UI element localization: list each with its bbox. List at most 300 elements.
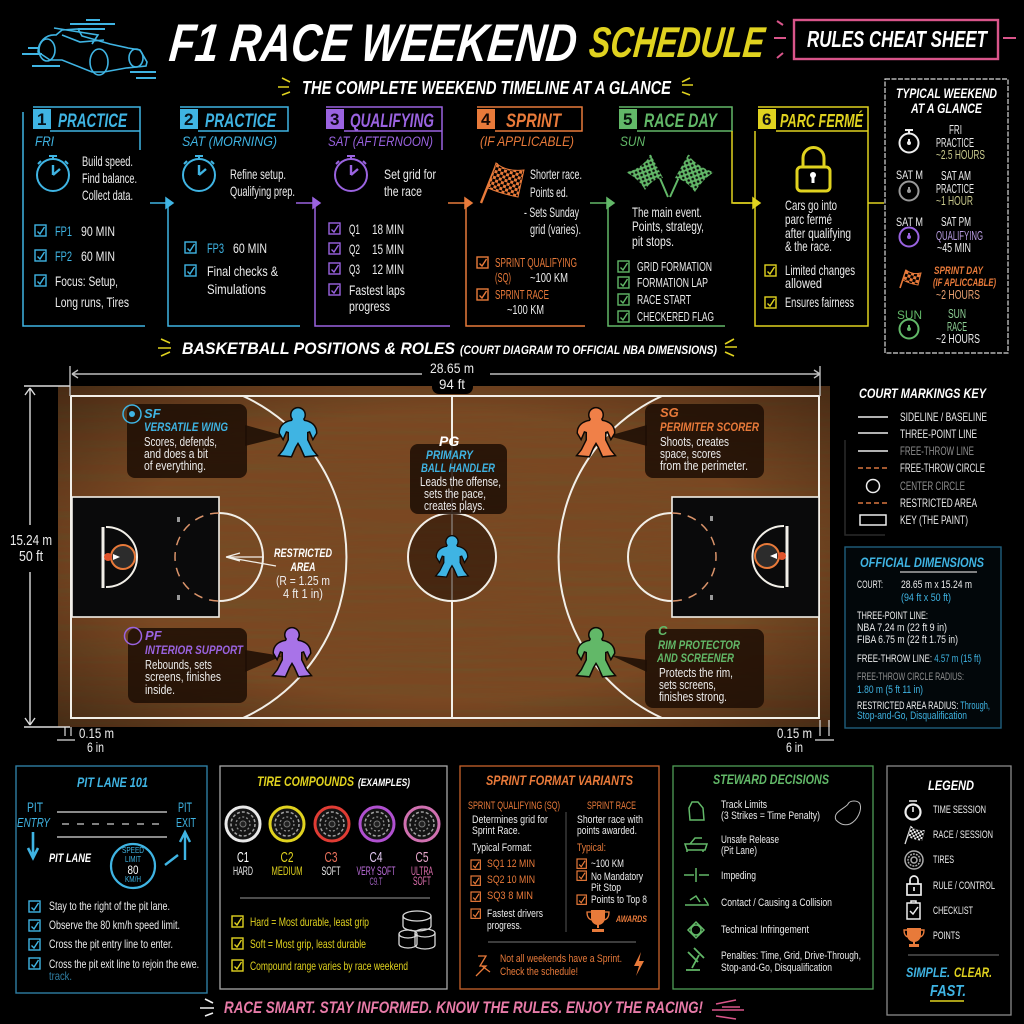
description: Qualifying prep. [230,183,295,199]
icon: checkered flag [481,163,524,203]
callout: power forward: PF [145,628,163,643]
dimension: court width: 15.24 m [10,532,52,549]
callout: shooting guard: Shoots, creates [660,434,729,449]
dimension list: FIBA 6.75 m (22 ft 1.75 in) [857,634,958,646]
dimension list: 1.80 m (5 ft 11 in) [857,684,923,696]
dimension: line width left [57,725,114,755]
dimension: court length: 94 ft [439,376,465,392]
icon: speed limit sign: SPEED [122,846,144,855]
checklist: 15 MIN [372,241,404,257]
icon: crossed checkered flags [626,155,714,197]
column: sprint race: SPRINT RACE [587,800,636,812]
key rows: THREE-POINT LINE [900,427,977,441]
court floor [58,386,830,727]
legend labels: POINTS [933,930,960,942]
heading: RACE DAY [644,111,719,132]
legend labels [933,804,995,942]
row: sprint day: SPRINT DAY [934,265,984,277]
left key [72,497,263,617]
row: saturday morning: ~1 HOUR [936,193,973,208]
dimension: court length: 28.65 m [430,360,474,376]
day label: SAT (AFTERNOON) [328,133,433,149]
heading: (EXAMPLES) [358,777,410,789]
panel: tire compounds [220,766,447,989]
step number 1 [33,109,51,129]
footer slogan: RACE SMART. STAY INFORMED. KNOW THE RULES. ENJOY THE RACING! [224,998,703,1017]
row: sprint day [900,265,996,302]
checklist: 60 MIN [81,248,115,264]
checklist: Cross the pit exit line to rejoin the ewe. [49,957,199,971]
player: power forward [274,628,310,676]
row: saturday afternoon: QUALIFYING [936,228,983,243]
callout: restricted area: (R = 1.25 m [276,573,330,588]
row: sunday: ~2 HOURS [936,331,980,346]
icon: trophy [587,910,609,932]
row: friday: PRACTICE [936,135,974,150]
panel: sprint [466,107,585,326]
dimension list: THREE-POINT LINE: [857,610,928,622]
tire: C1 hard: C1 [237,849,249,866]
day label: FRI [35,133,54,149]
checklist: FORMATION LAP [637,275,708,290]
callout: restricted area [226,546,332,601]
tire: C5 ultra soft: SOFT [413,874,431,888]
description [82,153,137,203]
section heading: basketball positions [158,339,737,358]
tire: C4 very soft [356,806,396,888]
checklist: Final checks & [207,263,279,279]
checklist: RACE START [637,292,691,307]
icon: stopwatch [183,156,215,191]
checklist: progress [349,298,390,314]
panel: practice saturday morning [168,107,300,326]
description [632,204,704,249]
panel: parc ferme [755,107,884,326]
checklist [329,221,405,314]
callout: restricted area: AREA [290,560,316,574]
callout: point guard: PRIMARY [426,448,474,462]
rule list: Contact / Causing a Collision [721,897,832,909]
step number 4 [477,109,495,129]
dimension: court width: 50 ft [19,548,44,565]
icon: speed limit sign: KM/H [125,875,141,884]
callout: point guard: PG [439,433,459,449]
column: sprint race: Shorter race with [577,814,643,826]
diagram: pit lane: PIT LANE [49,851,92,865]
row: saturday afternoon: SAT M [896,215,923,229]
dimension list: (94 ft x 50 ft) [901,592,951,604]
checklist: Ensures fairness [785,294,854,310]
description: pit stops. [632,233,674,249]
checklist: (SQ) [495,270,511,285]
callout: center: finishes strong. [659,689,727,704]
checklist: allowed [785,275,822,291]
tire: C3 soft [314,806,350,878]
icon: stopwatch [335,156,367,191]
icon: padlock [797,148,830,191]
callout: small forward [123,404,285,478]
heading: PRACTICE [58,111,128,132]
description [384,166,436,199]
checklist: ~100 KM [530,270,568,285]
day label: SUN [620,133,646,149]
diagram: pit lane [17,799,196,888]
callout: power forward: inside. [145,682,175,697]
key rows: RESTRICTED AREA [900,496,977,510]
callout: point guard: sets the pace, [424,486,486,501]
description: & the race. [785,238,832,254]
checklist [477,255,577,317]
player: shooting guard [578,408,614,456]
tire: C2 medium [270,806,304,878]
checklist: Q2 [349,241,360,257]
row: saturday morning: SAT AM [941,168,971,183]
checklist: Fastest laps [349,282,405,298]
column: sprint race: ~100 KM [591,858,624,870]
note: Not all weekends have a Sprint. [500,953,622,965]
callout: small forward: and does a bit [144,446,208,461]
checklist: Soft = Most grip, least durable [250,937,366,951]
checklist: 90 MIN [81,223,115,239]
description: after qualifying [785,225,851,241]
column: sprint race: points awarded. [577,825,637,837]
tagline: FAST. [930,983,966,1000]
checklist: ~100 KM [507,302,544,317]
tire: C4 very soft: VERY SOFT [356,864,396,878]
icon: race session [905,826,925,844]
dimension list: FREE-THROW LINE: 4.57 m (15 ft) [857,653,981,665]
row: sunday: SUN [948,306,966,321]
checklist: Long runs, Tires [55,294,129,310]
callout: center [610,623,764,708]
rule list: Impeding [721,870,756,882]
tire: C1 hard [226,806,260,878]
rule list: (Pit Lane) [721,845,757,857]
checklist: Q3 [349,261,360,277]
row: saturday afternoon [896,214,983,255]
checklist [185,240,279,297]
callout: point guard: BALL HANDLER [421,461,495,475]
callout: restricted area: RESTRICTED [274,546,332,560]
checklist [232,915,408,973]
rule list: Stop-and-Go, Disqualification [721,962,832,974]
icon: speed limit sign: 80 [128,863,139,877]
description: Points ed. [530,184,568,200]
court lines [71,396,819,718]
callout: small forward: of everything. [144,458,206,473]
dimension: court length [70,360,820,396]
description: Find balance. [82,170,137,186]
description: grid (varies). [530,221,581,237]
tire: C3 soft: C3 [324,849,338,866]
icon: stopwatch [37,156,69,191]
row: sprint day: ~2 HOURS [936,287,980,302]
tire: C4 very soft: C4 [370,849,382,866]
arrow [590,198,614,208]
dimension: court width [10,386,70,727]
heading: SPRINT [506,111,562,132]
callout: restricted area: 4 ft 1 in) [283,586,323,601]
key rows [858,410,987,527]
row: friday [900,122,985,162]
column: sprint qualifying: Fastest drivers [487,908,543,920]
step number 5: 5 [623,110,632,129]
callout: power forward: INTERIOR SUPPORT [145,643,244,657]
column: sprint race: Typical: [577,842,606,854]
tire: C1 hard: HARD [233,864,253,878]
column: sprint race: No Mandatory [591,871,643,883]
note [476,952,644,978]
section heading: basketball positions: BASKETBALL POSITIONS & ROLES [182,339,456,358]
checklist: FP2 [55,248,72,264]
panel: legend [887,766,1011,1015]
row: saturday afternoon: ~45 MIN [937,240,971,255]
row: friday: ~2.5 HOURS [936,147,985,162]
checklist [765,262,855,310]
arrow [150,198,173,208]
step number 1: 1 [37,110,46,129]
dimension: line width right: 6 in [786,739,803,755]
legend labels: CHECKLIST [933,905,973,917]
checklist: Hard = Most durable, least grip [250,915,369,929]
icon: time session [906,801,920,820]
description: Shorter race. [530,166,582,182]
description [230,166,295,199]
chart: basketball court diagram [58,386,830,727]
diagram: pit lane: PIT [178,799,192,815]
icon: rule control [907,876,921,895]
checklist: Limited changes [785,262,855,278]
icon: track outline [835,801,861,825]
player: point guard [437,536,467,576]
callout: center: AND SCREENER [656,651,734,665]
dimension list: FREE-THROW CIRCLE RADIUS: [857,671,964,683]
checklist [35,223,129,310]
row: saturday afternoon: SAT PM [941,214,971,229]
callout: center: RIM PROTECTOR [658,638,740,652]
step number 3 [326,109,344,129]
callout: shooting guard: space, scores [660,446,721,461]
tire: C4 very soft: C9.T [370,876,383,888]
row: saturday morning: PRACTICE [936,181,974,196]
checklist: GRID FORMATION [637,259,712,274]
row: friday: FRI [949,122,962,137]
heading: LEGEND [928,777,974,793]
note: Check the schedule! [500,966,578,978]
heading: TIRE COMPOUNDS [257,773,354,789]
step number 6 [758,109,776,129]
callout: shooting guard [608,404,764,478]
panel: race day [608,107,750,326]
checklist: 18 MIN [372,221,404,237]
checklist: CHECKERED FLAG [637,309,714,324]
dimension list: NBA 7.24 m (22 ft 9 in) [857,622,947,634]
row: saturday morning [896,168,974,208]
heading: STEWARD DECISIONS [713,771,830,787]
panel: pit lane 101 [16,766,207,993]
heading: OFFICIAL DIMENSIONS [860,554,985,570]
checklist: track. [49,969,72,983]
callout: center: Protects the rim, [659,665,733,680]
icon: checklist [907,901,920,919]
key rows: SIDELINE / BASELINE [900,410,987,424]
rule list: Unsafe Release [721,834,779,846]
heading: QUALIFYING [350,111,434,132]
title: F1 RACE WEEKEND [167,14,580,73]
day label: (IF APPLICABLE) [480,133,574,149]
description: Points, strategy, [632,218,704,234]
icons [684,802,709,970]
callout: small forward: Scores, defends, [144,434,217,449]
dimension: line width left: 6 in [87,739,104,755]
description: The main event. [632,204,702,220]
legend labels: TIRES [933,854,954,866]
panel: typical weekend at a glance [885,79,1008,353]
column: sprint qualifying: SQ2 10 MIN [487,874,535,886]
checklist: Simulations [207,281,266,297]
callout: small forward: VERSATILE WING [144,420,228,434]
column: sprint qualifying: SQ3 8 MIN [487,890,533,902]
tire: C5 ultra soft [404,806,440,888]
key rows: FREE-THROW LINE [900,444,974,458]
column: sprint qualifying: Sprint Race. [472,825,520,837]
tire: C5 ultra soft: ULTRA [411,864,433,878]
rule list: Penalties: Time, Grid, Drive-Through, [721,950,861,962]
panel: steward decisions [673,766,873,989]
callout: point guard: Leads the offense, [420,474,501,489]
diagram: pit lane: ENTRY [17,815,51,830]
heading [896,85,997,116]
dimension list: COURT: [857,579,883,591]
heading: PARC FERMÉ [780,110,864,131]
description [524,166,582,237]
dimension: line width left: 0.15 m [79,725,114,741]
badge: rules cheat sheet [774,20,1016,59]
description: the race [384,183,422,199]
checklist: 60 MIN [233,240,267,256]
checklist: FP3 [207,240,224,256]
dimension list: RESTRICTED AREA RADIUS: Through, [857,700,990,712]
subtitle: THE COMPLETE WEEKEND TIMELINE AT A GLANCE [302,78,672,98]
tire: C2 medium: MEDIUM [272,864,302,878]
dimension list [857,579,990,722]
tire: C3 soft: SOFT [322,864,341,878]
row: sunday: RACE [947,319,967,334]
heading: AT A GLANCE [910,100,982,116]
section heading: basketball positions: (COURT DIAGRAM TO OFFICIAL NBA DIMENSIONS) [460,343,717,357]
callout: small forward: SF [144,406,162,421]
column: sprint race: Points to Top 8 [591,894,647,906]
panel: sprint format variants [460,766,659,989]
description: parc fermé [785,211,832,227]
callout: shooting guard: from the perimeter. [660,458,748,473]
heading: COURT MARKINGS KEY [859,385,987,401]
panel: official dimensions [845,547,1001,728]
step number 2 [180,109,198,129]
checklist: Focus: Setup, [55,273,118,289]
callout: point guard [410,433,507,514]
heading: PRACTICE [205,111,277,132]
heading: SPRINT FORMAT VARIANTS [486,772,634,788]
description: Collect data. [82,187,133,203]
legend labels: RULE / CONTROL [933,880,995,892]
step number 2: 2 [184,110,193,129]
callout: power forward: Rebounds, sets [145,657,212,672]
description [785,197,851,254]
icon: points trophy [904,928,924,947]
day label: SAT (MORNING) [182,133,277,149]
column: sprint qualifying: progress. [487,920,522,932]
panel: practice friday [23,107,145,326]
dimension list: 28.65 m x 15.24 m [901,579,972,591]
player: small forward [280,408,316,456]
step number 6: 6 [762,110,771,129]
legend labels: TIME SESSION [933,804,986,816]
rule list: Technical Infringement [721,924,809,936]
arrow [296,198,320,208]
column: sprint race: AWARDS [615,914,647,924]
heading: PIT LANE 101 [77,774,148,790]
diagram: pit lane: PIT [27,799,43,815]
column: sprint qualifying [468,800,560,932]
tagline: SIMPLE. [906,964,950,980]
dimension list: Stop-and-Go, Disqualification [857,710,967,722]
icon: speed limit sign: LIMIT [125,855,141,864]
checklist: SPRINT QUALIFYING [495,255,577,270]
step number 3: 3 [330,110,339,129]
tire: C5 ultra soft: C5 [416,849,428,866]
callout: power forward [124,628,282,703]
checklist [618,259,714,324]
icon: tires [905,851,923,869]
column: sprint qualifying: Typical Format: [472,842,532,854]
row: sprint day: (IF APLICCABLE) [933,277,996,289]
arrow [448,198,472,208]
tagline [906,964,992,1001]
column: sprint qualifying: Determines grid for [472,814,548,826]
icon: racing car [22,20,156,78]
rule list [721,799,861,974]
right key [628,497,819,617]
legend labels: RACE / SESSION [933,829,993,841]
panel: qualifying [315,107,450,326]
player: center [578,628,614,676]
tagline: CLEAR. [954,964,992,980]
description: Refine setup. [230,166,286,182]
checklist: Compound range varies by race weekend [250,959,408,973]
checklist: Stay to the right of the pit lane. [49,899,170,913]
key rows: CENTER CIRCLE [900,479,965,493]
row: sunday [897,306,980,346]
description: Cars go into [785,197,837,213]
row: sunday: SUN [897,308,922,322]
icon: tire stack [399,911,435,949]
rule list: (3 Strikes = Time Penalty) [721,810,820,822]
column: sprint qualifying: SPRINT QUALIFYING (SQ) [468,800,560,812]
checklist: Cross the pit entry line to enter. [49,937,173,951]
checklist: SPRINT RACE [495,287,549,302]
dimension: line width right [777,720,834,755]
callout: shooting guard: SG [660,405,679,420]
callout: center: C [658,623,668,638]
icon: speed limit sign [111,844,155,888]
title accent: schedule: SCHEDULE [587,19,768,67]
callout: power forward: screens, finishes [145,669,221,684]
tire: C2 medium: C2 [280,849,294,866]
row: saturday morning: SAT M [896,168,923,182]
callout: point guard: creates plays. [424,498,485,513]
key rows: KEY (THE PAINT) [900,513,968,527]
